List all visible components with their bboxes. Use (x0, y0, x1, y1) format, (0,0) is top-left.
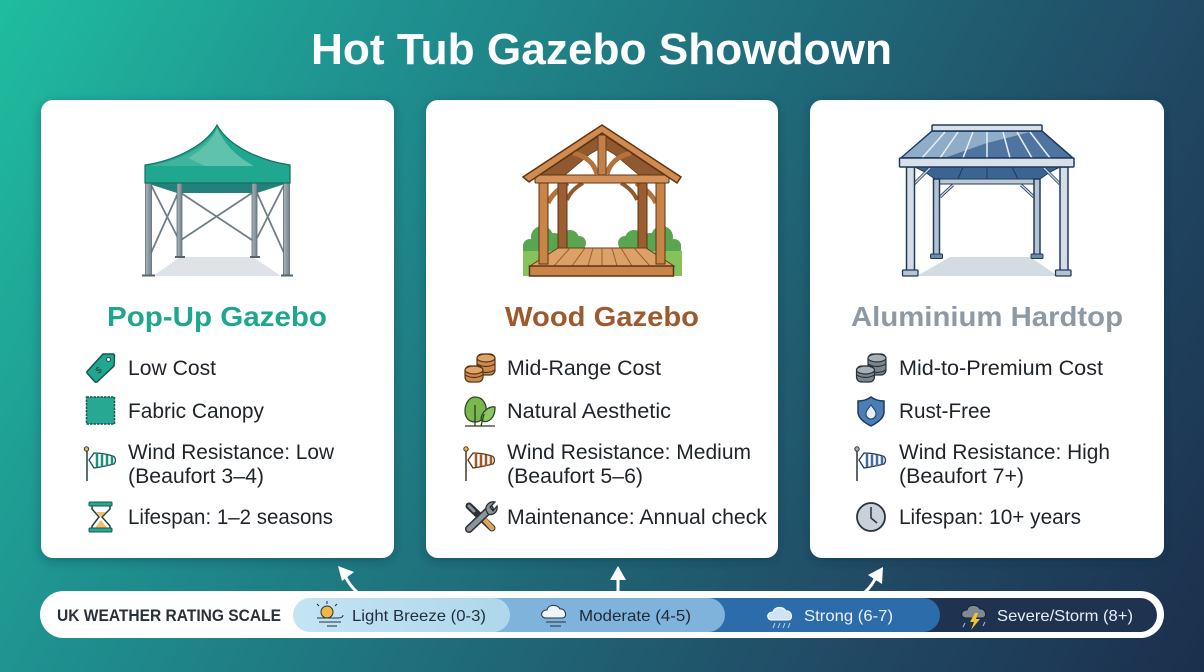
item: beaufort 7+: (Beaufort 7+) (899, 465, 1024, 488)
item: beaufort 5-6: (Beaufort 5–6) (507, 465, 643, 488)
icon: trees (465, 397, 495, 426)
item: wind resistance high: Wind Resistance: High (899, 441, 1110, 464)
icon: windsock (855, 447, 886, 481)
panel: aluminium hardtop (810, 100, 1164, 558)
icon: shield with water drop (858, 397, 884, 426)
illustration: aluminium hardtop (900, 125, 1074, 276)
segment: light breeze: Light Breeze (0-3) (352, 608, 486, 625)
item: rust-free: Rust-Free (899, 400, 991, 423)
panel: wood gazebo (426, 100, 778, 558)
item: natural aesthetic: Natural Aesthetic (507, 400, 671, 423)
heading: wood gazebo: Wood Gazebo (505, 301, 699, 332)
heading: aluminium hardtop: Aluminium Hardtop (851, 301, 1123, 332)
item: lifespan 10+ years: Lifespan: 10+ years (899, 506, 1081, 529)
icon: tools (469, 502, 497, 529)
icon: sun and breeze (317, 601, 343, 626)
icon: wood coins (465, 354, 495, 382)
item: wind resistance low: Wind Resistance: Low (128, 441, 335, 464)
arrow: to pop-up gazebo (338, 566, 357, 592)
arrow: to aluminium hardtop (865, 567, 883, 592)
item: wind resistance medium: Wind Resistance: Medium (507, 441, 751, 464)
icon: price tag: $ (93, 365, 104, 376)
item: mid-to-premium cost: Mid-to-Premium Cost (899, 357, 1103, 380)
panel: pop-up gazebo (41, 100, 394, 558)
illustration: pop-up gazebo (142, 125, 293, 276)
weather rating scale bar (40, 591, 1164, 638)
segment: strong: Strong (6-7) (804, 608, 893, 625)
item: maintenance annual check: Maintenance: Annual check (507, 506, 768, 529)
segment: severe storm: Severe/Storm (8+) (997, 608, 1133, 625)
item: lifespan 1-2 seasons: Lifespan: 1–2 seasons (128, 506, 333, 529)
icon: windsock (84, 447, 116, 481)
scale label: UK WEATHER RATING SCALE (57, 607, 281, 625)
icon: windsock (464, 447, 494, 481)
item: fabric canopy: Fabric Canopy (128, 400, 264, 423)
segment: moderate: Moderate (4-5) (579, 608, 691, 625)
illustration: wood gazebo (523, 125, 682, 276)
icon: rain cloud (768, 607, 792, 628)
icon: price tag (87, 354, 114, 382)
icon: hourglass (89, 502, 112, 532)
title: Hot Tub Gazebo Showdown (311, 25, 892, 74)
heading: pop-up gazebo: Pop-Up Gazebo (107, 301, 327, 332)
icon: storm cloud (962, 605, 986, 630)
arrow: to wood gazebo (610, 566, 626, 592)
icon: clock (857, 503, 885, 531)
icon: steel coins (856, 354, 886, 382)
item: low cost: Low Cost (128, 357, 216, 380)
icon: cloud and wind (542, 605, 566, 626)
item: mid-range cost: Mid-Range Cost (507, 357, 661, 380)
icon: fabric swatch (86, 397, 114, 424)
item: beaufort 3-4: (Beaufort 3–4) (128, 465, 264, 488)
